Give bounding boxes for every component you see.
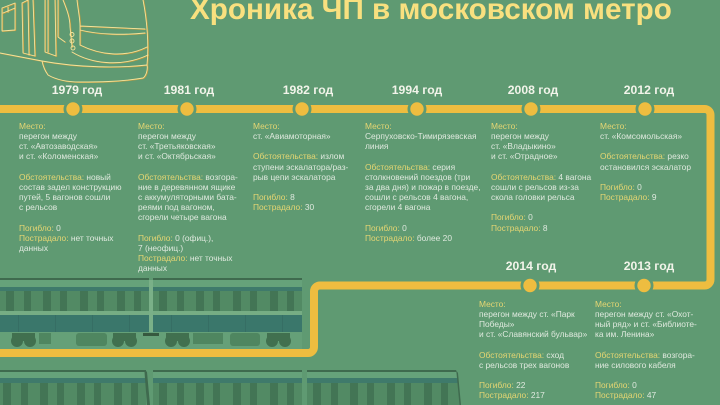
text: 2013: перегон между ст. «Охот- bbox=[595, 309, 693, 319]
year: 2012: 2012 год bbox=[624, 83, 674, 97]
text: 1981: реями под вагоном, bbox=[138, 202, 215, 212]
text: 1994: Серпуховско-Тимирязевская bbox=[365, 131, 477, 141]
text: 1994: за два дня) и пожар в поезде, bbox=[365, 182, 481, 192]
text: 2013: ние силового кабеля bbox=[595, 360, 676, 370]
text: 2013: ный ряд» и ст. «Библиоте- bbox=[595, 319, 697, 329]
text: 1979: ст. «Автозаводская» bbox=[19, 141, 98, 151]
year: 1994: 1994 год bbox=[392, 83, 442, 97]
text: 1994: сошли с рельсов 4 вагона, bbox=[365, 192, 468, 202]
text: 1982: рыв цепи эскалатора bbox=[253, 172, 335, 182]
train: upper row bbox=[0, 278, 302, 349]
year: 2014: 2014 год bbox=[506, 259, 556, 273]
text: 2013 bbox=[595, 299, 697, 400]
text: 2012: Обстоятельства: резко bbox=[600, 151, 689, 161]
text: 2008 bbox=[491, 121, 592, 233]
icon: train front outline bbox=[0, 0, 149, 82]
text: 2013: ка им. Ленина» bbox=[595, 329, 654, 339]
text: 1994: линия bbox=[365, 141, 388, 151]
text: 1994 bbox=[365, 121, 481, 243]
text: 2014: Пострадало: 217 bbox=[479, 390, 545, 400]
year: 2008: 2008 год bbox=[508, 83, 558, 97]
text: 2014: Погибло: 22 bbox=[479, 380, 525, 390]
text: 2008: Погибло: 0 bbox=[491, 212, 533, 222]
text: 1994: Пострадало: более 20 bbox=[365, 233, 452, 243]
text: 1982: ступени эскалатора/раз- bbox=[253, 162, 348, 172]
text: 2012: Место: bbox=[600, 121, 627, 131]
text: 2014: с рельсов трех вагонов bbox=[479, 360, 569, 370]
text: 2012: Пострадало: 9 bbox=[600, 192, 657, 202]
text: 2008: перегон между bbox=[491, 131, 549, 141]
text: 1981: данных bbox=[138, 263, 167, 273]
text: 1979: состав задел конструкцию bbox=[19, 182, 122, 192]
text: 1981: ние в деревянном ящике bbox=[138, 182, 235, 192]
text: 1979: и ст. «Коломенская» bbox=[19, 151, 98, 161]
route line bbox=[0, 100, 710, 353]
text: 1981: 7 (неофиц.) bbox=[138, 243, 183, 253]
year: 1979: 1979 год bbox=[52, 83, 102, 97]
text: 1981: Обстоятельства: возгора- bbox=[138, 172, 238, 182]
text: 1981: сгорели четыре вагона bbox=[138, 212, 227, 222]
text: 2012: Погибло: 0 bbox=[600, 182, 642, 192]
text: 2013: Погибло: 0 bbox=[595, 380, 637, 390]
year: 2013: 2013 год bbox=[624, 259, 674, 273]
text: 2008: ст. «Владыкино» bbox=[491, 141, 556, 151]
text: 1979: Пострадало: нет точных bbox=[19, 233, 113, 243]
text: 1979: Погибло: 0 bbox=[19, 223, 61, 233]
text: 1979: перегон между bbox=[19, 131, 77, 141]
text: 1994: Место: bbox=[365, 121, 392, 131]
text: 2012: остановился эскалатор bbox=[600, 162, 691, 172]
text: 1981: ст. «Третьяковская» bbox=[138, 141, 215, 151]
year: 1981: 1981 год bbox=[164, 83, 214, 97]
year: 1982: 1982 год bbox=[283, 83, 333, 97]
text: 2008: Обстоятельства: 4 вагона bbox=[491, 172, 591, 182]
text: 2008: скола головки рельса bbox=[491, 192, 575, 202]
text: 1979: Обстоятельства: новый bbox=[19, 172, 111, 182]
text: 2014: Победы» bbox=[479, 319, 514, 329]
text: 1982 bbox=[253, 121, 348, 212]
text: 2008: и ст. «Отрадное» bbox=[491, 151, 558, 161]
text: 2008: Место: bbox=[491, 121, 518, 131]
text: 1979: данных bbox=[19, 243, 48, 253]
text: 1994: Погибло: 0 bbox=[365, 223, 407, 233]
text: 1981: перегон между bbox=[138, 131, 196, 141]
text: 1979: с рельсов bbox=[19, 202, 57, 212]
text: 2012: ст. «Комсомольская» bbox=[600, 131, 682, 141]
text: 1982: Пострадало: 30 bbox=[253, 202, 314, 212]
text: 2012 bbox=[600, 121, 691, 202]
text: 2013: Пострадало: 47 bbox=[595, 390, 656, 400]
text: 2014: Место: bbox=[479, 299, 506, 309]
text: 2013: Обстоятельства: возгора- bbox=[595, 350, 695, 360]
text: 1982: ст. «Авиамоторная» bbox=[253, 131, 331, 141]
text: 2013: Место: bbox=[595, 299, 622, 309]
text: 2008: Пострадало: 8 bbox=[491, 223, 548, 233]
text: 1994: столкновений поездов (три bbox=[365, 172, 470, 182]
text: 1981: Пострадало: нет точных bbox=[138, 253, 232, 263]
text: 2014: перегон между ст. «Парк bbox=[479, 309, 575, 319]
text: 1981: и ст. «Октябрьская» bbox=[138, 151, 216, 161]
text: 1979: Место: bbox=[19, 121, 46, 131]
text: 1982: Обстоятельства: излом bbox=[253, 151, 344, 161]
text: 1981 bbox=[138, 121, 238, 273]
text: 1982: Погибло: 8 bbox=[253, 192, 295, 202]
text: 1982: Место: bbox=[253, 121, 280, 131]
text: 1994: сгорели 4 вагона bbox=[365, 202, 430, 212]
text: 2014 bbox=[479, 299, 587, 400]
text: 1979 bbox=[19, 121, 122, 253]
text: 1994: Обстоятельства: серия bbox=[365, 162, 455, 172]
text: 2008: сошли с рельсов из-за bbox=[491, 182, 579, 192]
text: 1981: Погибло: 0 (офиц.), bbox=[138, 233, 213, 243]
text: 2014: и ст. «Славянский бульвар» bbox=[479, 329, 587, 339]
text: 2014: Обстоятельства: сход bbox=[479, 350, 564, 360]
text: 1979: путей, 5 вагонов сошли bbox=[19, 192, 110, 202]
text: 1981: с аккумуляторными бата- bbox=[138, 192, 237, 202]
text: 1981: Место: bbox=[138, 121, 165, 131]
train: lower row bbox=[0, 370, 461, 405]
